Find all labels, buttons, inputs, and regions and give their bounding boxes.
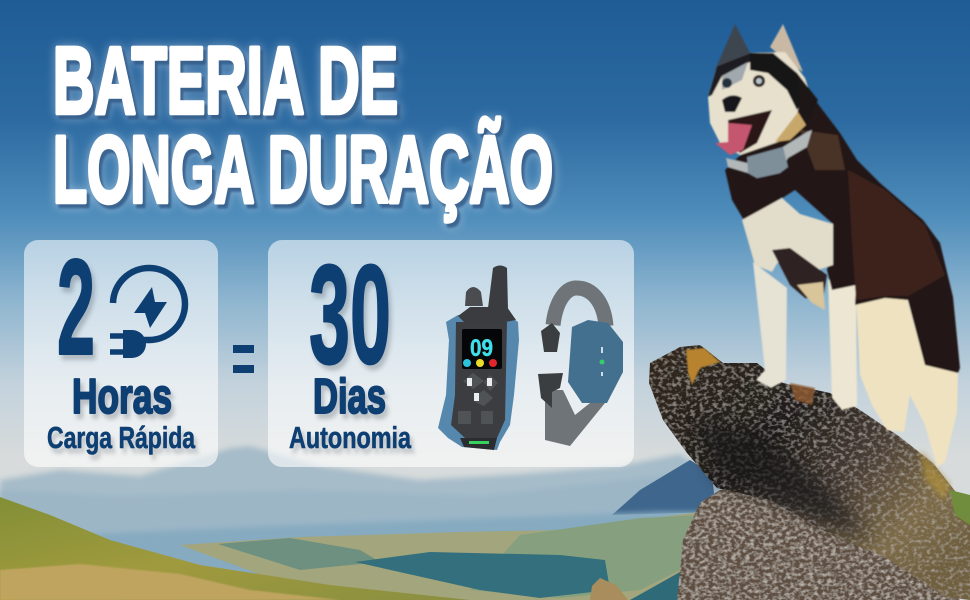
small rock at bottom: [590, 578, 628, 600]
chest white: [742, 198, 833, 272]
front legs: [753, 262, 787, 388]
label: Autonomia: Autonomia: [289, 420, 412, 455]
panel: charge time: [24, 231, 218, 467]
label: Horas: Horas: [72, 370, 172, 424]
title: [53, 28, 553, 223]
distant mountains: [0, 446, 720, 600]
lower rock: [677, 480, 960, 600]
rock shadow: [690, 420, 870, 540]
foreground grassy hill: [0, 497, 470, 600]
dark coat: [725, 100, 960, 373]
number 2: 2: [57, 231, 95, 383]
head: [708, 52, 814, 155]
hind leg and tail tip: [856, 290, 958, 467]
panel: autonomy: [268, 235, 634, 467]
rock formation: [649, 345, 970, 600]
title: LONGA DURAÇÃO: [53, 117, 553, 223]
label: Carga Rápida: Carga Rápida: [47, 420, 196, 455]
number 30: 30: [309, 235, 391, 393]
label: Dias: Dias: [313, 370, 386, 424]
lichen patches: [686, 348, 720, 385]
remote transmitter: 09: [470, 335, 493, 362]
valley meadows: [180, 512, 700, 600]
collar with receiver: [538, 288, 623, 446]
husky dog: [708, 24, 960, 467]
upper rock: [649, 345, 970, 600]
mouth and tongue: [728, 110, 772, 153]
remote transmitter: [438, 266, 519, 450]
ears: [715, 24, 750, 70]
title: BATERIA DE: [53, 28, 398, 134]
dog collar: [726, 130, 812, 178]
equals sign: [233, 345, 254, 373]
grass tuft: [950, 490, 970, 525]
icon: charging plug: [110, 268, 185, 358]
